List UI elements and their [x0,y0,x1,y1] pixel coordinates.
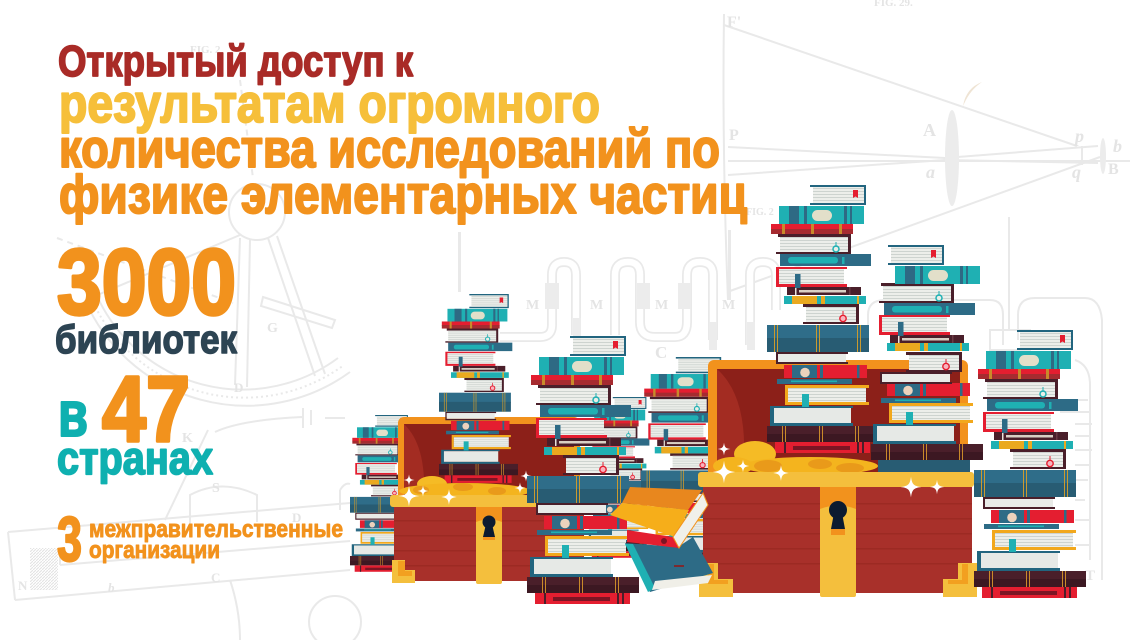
diagram: circuit and magnet apparatus: b [108,580,115,595]
label: countries: странах [57,432,213,484]
chest body [703,487,972,593]
sparkles [713,443,944,497]
strap and keyhole [476,507,502,584]
coins [399,476,531,499]
chest lid [398,417,580,507]
sparkles [399,470,532,506]
chest corner [392,560,415,583]
treasure chest: left [390,294,585,584]
diagram: lens optics: P [729,127,739,144]
title line 4: физике элементарных частиц [59,165,747,225]
diagram: U-tubes: M [526,298,539,313]
book stack: front middle [527,336,639,604]
second book stack inside chest [871,245,983,472]
title line 2: результатам огромного [59,74,600,134]
label line 1: межправительственные [89,516,343,543]
blue book [625,537,713,592]
diagram: lens optics: FIG. 2 [746,207,774,218]
coins [713,441,878,475]
diagram: lens optics: q [1072,162,1081,182]
diagram: lens optics [724,0,1130,300]
stat: 3000 libraries [55,230,238,362]
strap and keyhole [820,487,856,597]
diagram: circuit and magnet apparatus: K [182,431,193,446]
diagram: lens optics: b [1113,136,1122,156]
stat: 3 organisations [57,505,343,575]
title line 1: Открытый доступ к [58,37,414,86]
diagram: U-tubes: M [590,298,603,313]
diagram: circuit and magnet apparatus: C [211,570,220,585]
title [58,37,747,225]
stat: 47 countries [57,357,213,484]
book stack: back middle [641,357,732,574]
diagram: sextant: G [267,321,278,336]
number 3000: 3000 [57,230,236,334]
diagram: jars and notes: T [1085,568,1095,584]
diagram: lens optics: p [1073,126,1084,146]
label line 2: организации [89,537,220,564]
diagram: lens optics: a [926,162,935,182]
tall book stack inside chest [767,185,879,453]
diagram: sextant [57,44,350,406]
word: в: в [58,378,88,450]
diagram: lens optics: F' [727,14,741,31]
diagram: circuit and magnet apparatus: S [212,481,220,496]
diagram: U-tubes: M [722,298,735,313]
diagram: circuit and magnet apparatus: D [292,510,301,525]
diagram: jars and notes [868,217,1102,584]
orange and yellow open book [610,487,708,548]
chest corners [699,563,977,597]
diagram: circuit and magnet apparatus: N [18,578,28,593]
chest rim [698,472,974,487]
book stack: right [974,330,1086,598]
chest body [394,507,584,581]
diagram: U-tubes [458,230,776,362]
diagram: sextant: FIG. 2 [190,44,221,56]
book stack: far back [587,397,654,558]
diagram: lens optics: B [1108,161,1119,178]
chest rim [390,495,585,507]
diagram: sextant: D [234,380,243,395]
diagram: U-tubes: M [655,298,668,313]
title line 3: количества исследований по [59,119,720,179]
diagram: lens optics: A [923,120,936,140]
treasure chest: right [698,185,983,597]
diagram: circuit and magnet apparatus [8,408,361,640]
tumbling books [610,487,713,592]
chest lid [708,360,968,485]
book stack inside chest [439,294,518,483]
book stack: far left [350,415,416,572]
label: libraries: библиотек [55,318,238,362]
number 47: 47 [102,357,190,461]
number 3: 3 [57,505,82,575]
diagram: U-tubes: C [655,343,667,362]
